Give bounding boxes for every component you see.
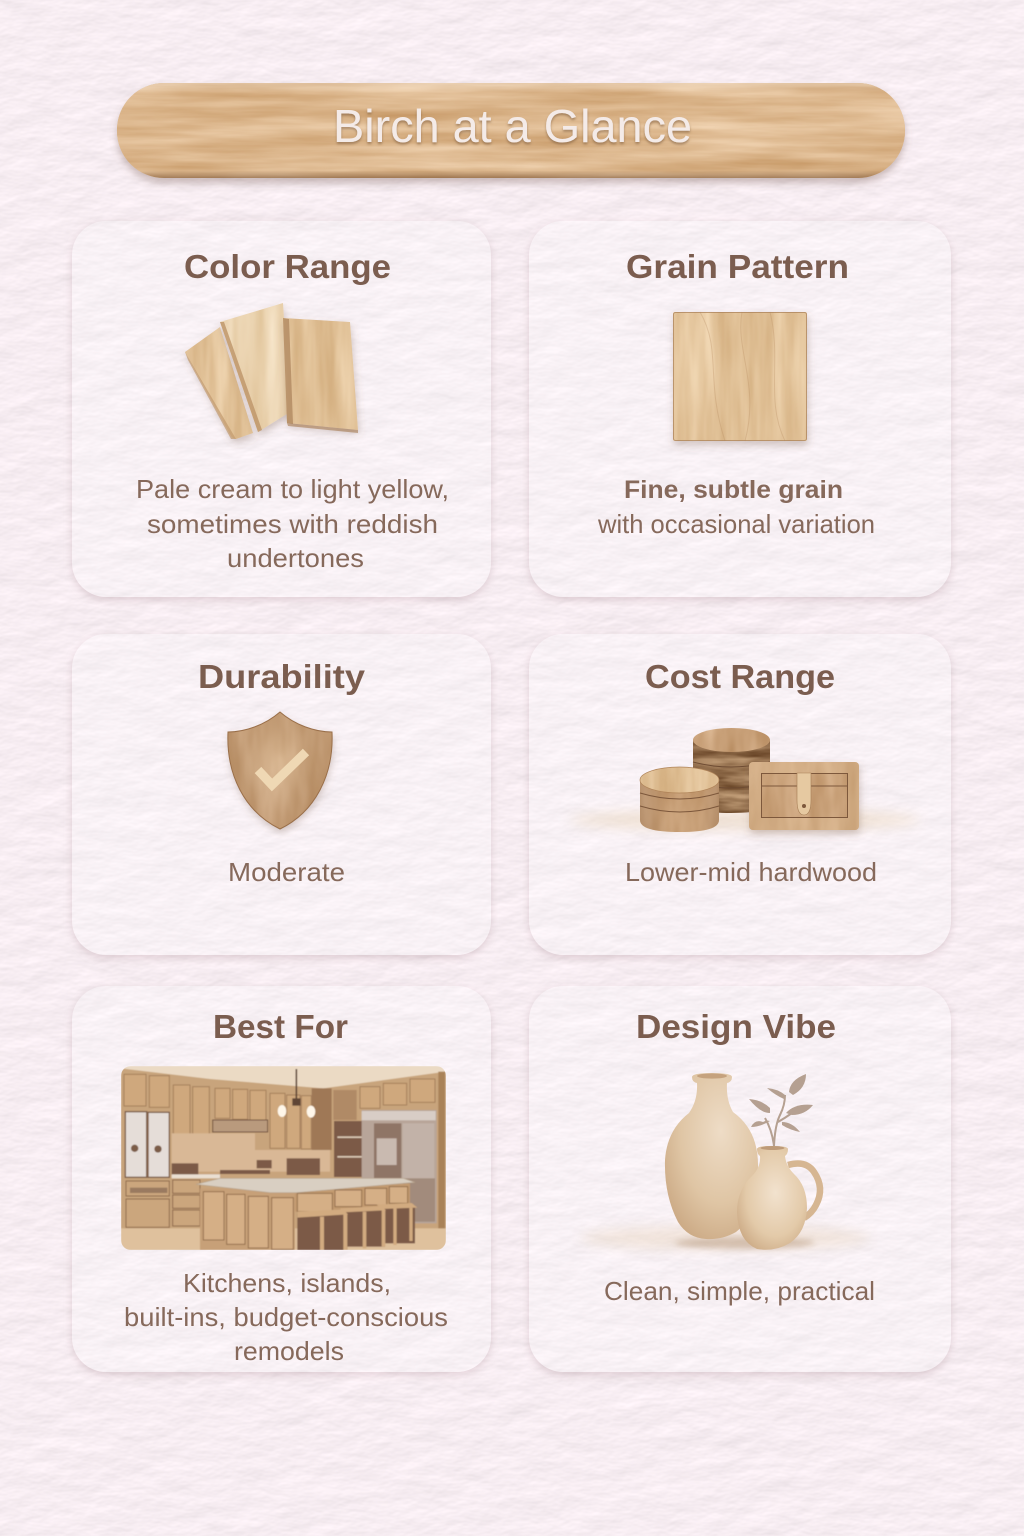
- body text: best for: [124, 1268, 448, 1366]
- body text: color range: undertones: [227, 543, 364, 573]
- icon: wooden coin stacks and chest: [570, 728, 920, 832]
- upper cabinets left: [124, 1074, 435, 1149]
- heading: best for: Best For: [213, 1008, 348, 1045]
- plant sprig: [749, 1074, 813, 1146]
- body text: color range: [136, 474, 449, 573]
- panel: best for: [72, 986, 491, 1372]
- icon: wood grain square: [673, 312, 807, 441]
- panel: cost range: [529, 634, 951, 955]
- heading: grain pattern: Grain Pattern: [626, 248, 849, 285]
- title plank: [117, 83, 905, 178]
- heading: design vibe: Design Vibe: [636, 1008, 836, 1045]
- body text: color range: sometimes with reddish: [147, 509, 438, 539]
- dark appliances: [172, 1163, 198, 1175]
- body text: color range: Pale cream to light yellow,: [136, 474, 449, 504]
- stainless fridge: [362, 1110, 437, 1223]
- icon: wood sample boards: [185, 303, 358, 439]
- body text: design vibe: Clean, simple, practical: [604, 1276, 875, 1306]
- image: birch kitchen: [121, 1066, 446, 1250]
- left fridge: [125, 1112, 169, 1177]
- body text: grain pattern: [597, 476, 875, 539]
- backsplash: [172, 1133, 255, 1172]
- panel: design vibe: [529, 986, 951, 1372]
- title: Birch at a Glance: [333, 100, 692, 152]
- island: [196, 1178, 415, 1250]
- panel: color range: [72, 221, 491, 597]
- panel: durability: [72, 634, 491, 955]
- front stack: [640, 767, 719, 832]
- body text: durability: Moderate: [228, 857, 345, 887]
- panel: grain pattern: [529, 221, 951, 597]
- body text: best for: Kitchens, islands,: [183, 1268, 391, 1298]
- heading: cost range: Cost Range: [645, 658, 835, 695]
- icon: clay vases with plant: [580, 1073, 870, 1250]
- back stack: [693, 728, 770, 813]
- icon: wooden shield with check: [228, 712, 332, 829]
- heading: durability: Durability: [198, 658, 366, 695]
- large vase: [665, 1073, 758, 1239]
- heading: color range: Color Range: [184, 248, 391, 285]
- pendant light: [278, 1069, 315, 1118]
- body text: best for: remodels: [234, 1336, 344, 1366]
- bar stools: [297, 1203, 417, 1250]
- chest: [749, 762, 859, 830]
- wall oven: [334, 1120, 362, 1178]
- body text: best for: built-ins, budget-conscious: [124, 1302, 448, 1332]
- body text: grain pattern: with occasional variation: [597, 509, 875, 539]
- small jug: [737, 1146, 820, 1250]
- body text: grain pattern: Fine, subtle grain: [624, 476, 843, 504]
- body text: cost range: Lower-mid hardwood: [625, 857, 877, 887]
